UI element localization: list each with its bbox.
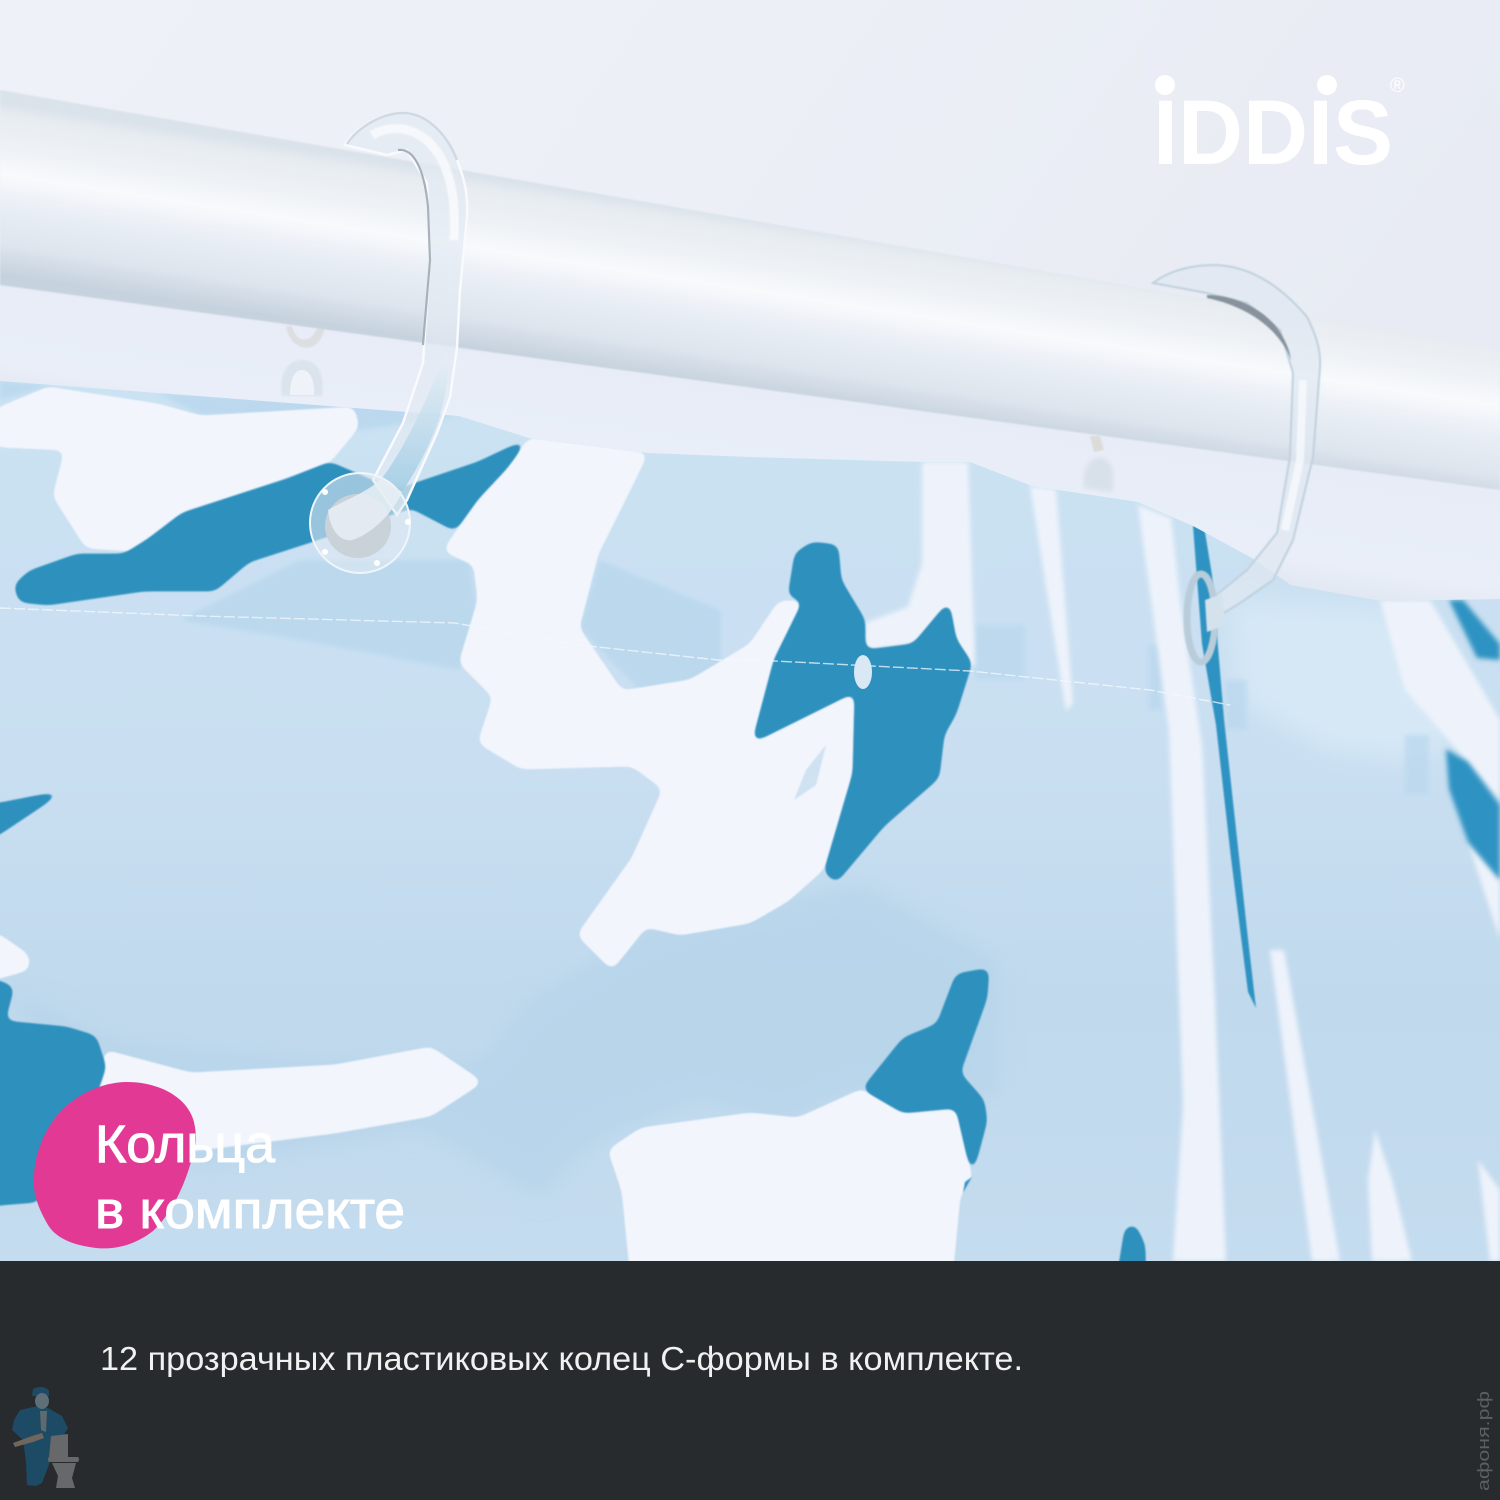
pale pocket shadows	[976, 626, 1430, 794]
small stitch eyelet	[854, 655, 872, 689]
ring body	[1153, 265, 1320, 617]
fabric mid-tone patches	[0, 381, 720, 690]
grommet	[310, 473, 410, 573]
icon: plumber with toilet watermark	[12, 1387, 79, 1488]
description text: 12 прозрачных пластиковых колец С-формы в комплекте.	[100, 1340, 1023, 1377]
fabric base tone	[0, 370, 1500, 1270]
ring foot	[328, 478, 402, 540]
grommet tabs	[322, 489, 411, 566]
back ring reflections behind the rod	[281, 326, 1113, 492]
lower mid-tone area	[104, 891, 988, 1184]
panel: dark footer	[0, 1261, 1500, 1500]
plumber face	[35, 1393, 49, 1409]
heading line 1: Кольца	[95, 1115, 275, 1174]
heading: rings included	[95, 1115, 405, 1240]
toilet	[48, 1434, 79, 1488]
plumber shirt	[40, 1411, 47, 1432]
ring inner dark edge	[398, 150, 430, 345]
grommet hole	[325, 494, 391, 558]
pink badge blob	[34, 1082, 196, 1248]
grommet seen edge-on	[1187, 574, 1215, 662]
panel: shower curtain fabric	[0, 370, 1500, 1290]
curtain rod	[0, 90, 1500, 490]
ring body	[345, 113, 467, 515]
ring top highlight	[372, 129, 454, 240]
ring outer shade	[347, 113, 457, 160]
icon: transparent C-ring right	[1153, 265, 1320, 662]
logo dots over the letters I	[1155, 75, 1337, 95]
white camouflage shapes	[0, 387, 972, 1290]
ring foot	[1205, 594, 1225, 632]
ring lower blue refraction	[382, 352, 448, 492]
pale spot in the white shape	[794, 745, 826, 800]
teal thin and defocused shapes	[963, 526, 1500, 1193]
stitching line	[0, 608, 1230, 705]
heading line 2: в комплекте	[95, 1181, 405, 1240]
registered mark: ®	[1390, 75, 1405, 97]
white defocused vertical stripes	[865, 462, 1500, 1261]
logo wordmark: IDDIS	[1153, 82, 1393, 184]
logo: IDDIS	[1153, 75, 1405, 184]
teal camouflage shapes	[0, 438, 1146, 1290]
icon: transparent C-ring left	[310, 113, 467, 573]
ring highlight	[1285, 380, 1303, 530]
ring dark crescent	[1207, 295, 1291, 360]
wall background	[0, 0, 1500, 620]
shadow band between rod and curtain	[0, 285, 1500, 620]
watermark: site name: афоня.рф	[1474, 1391, 1493, 1491]
plumber figure	[12, 1387, 68, 1486]
lighter defocused patch on the right	[1237, 607, 1443, 753]
plumber wrench	[13, 1433, 44, 1447]
